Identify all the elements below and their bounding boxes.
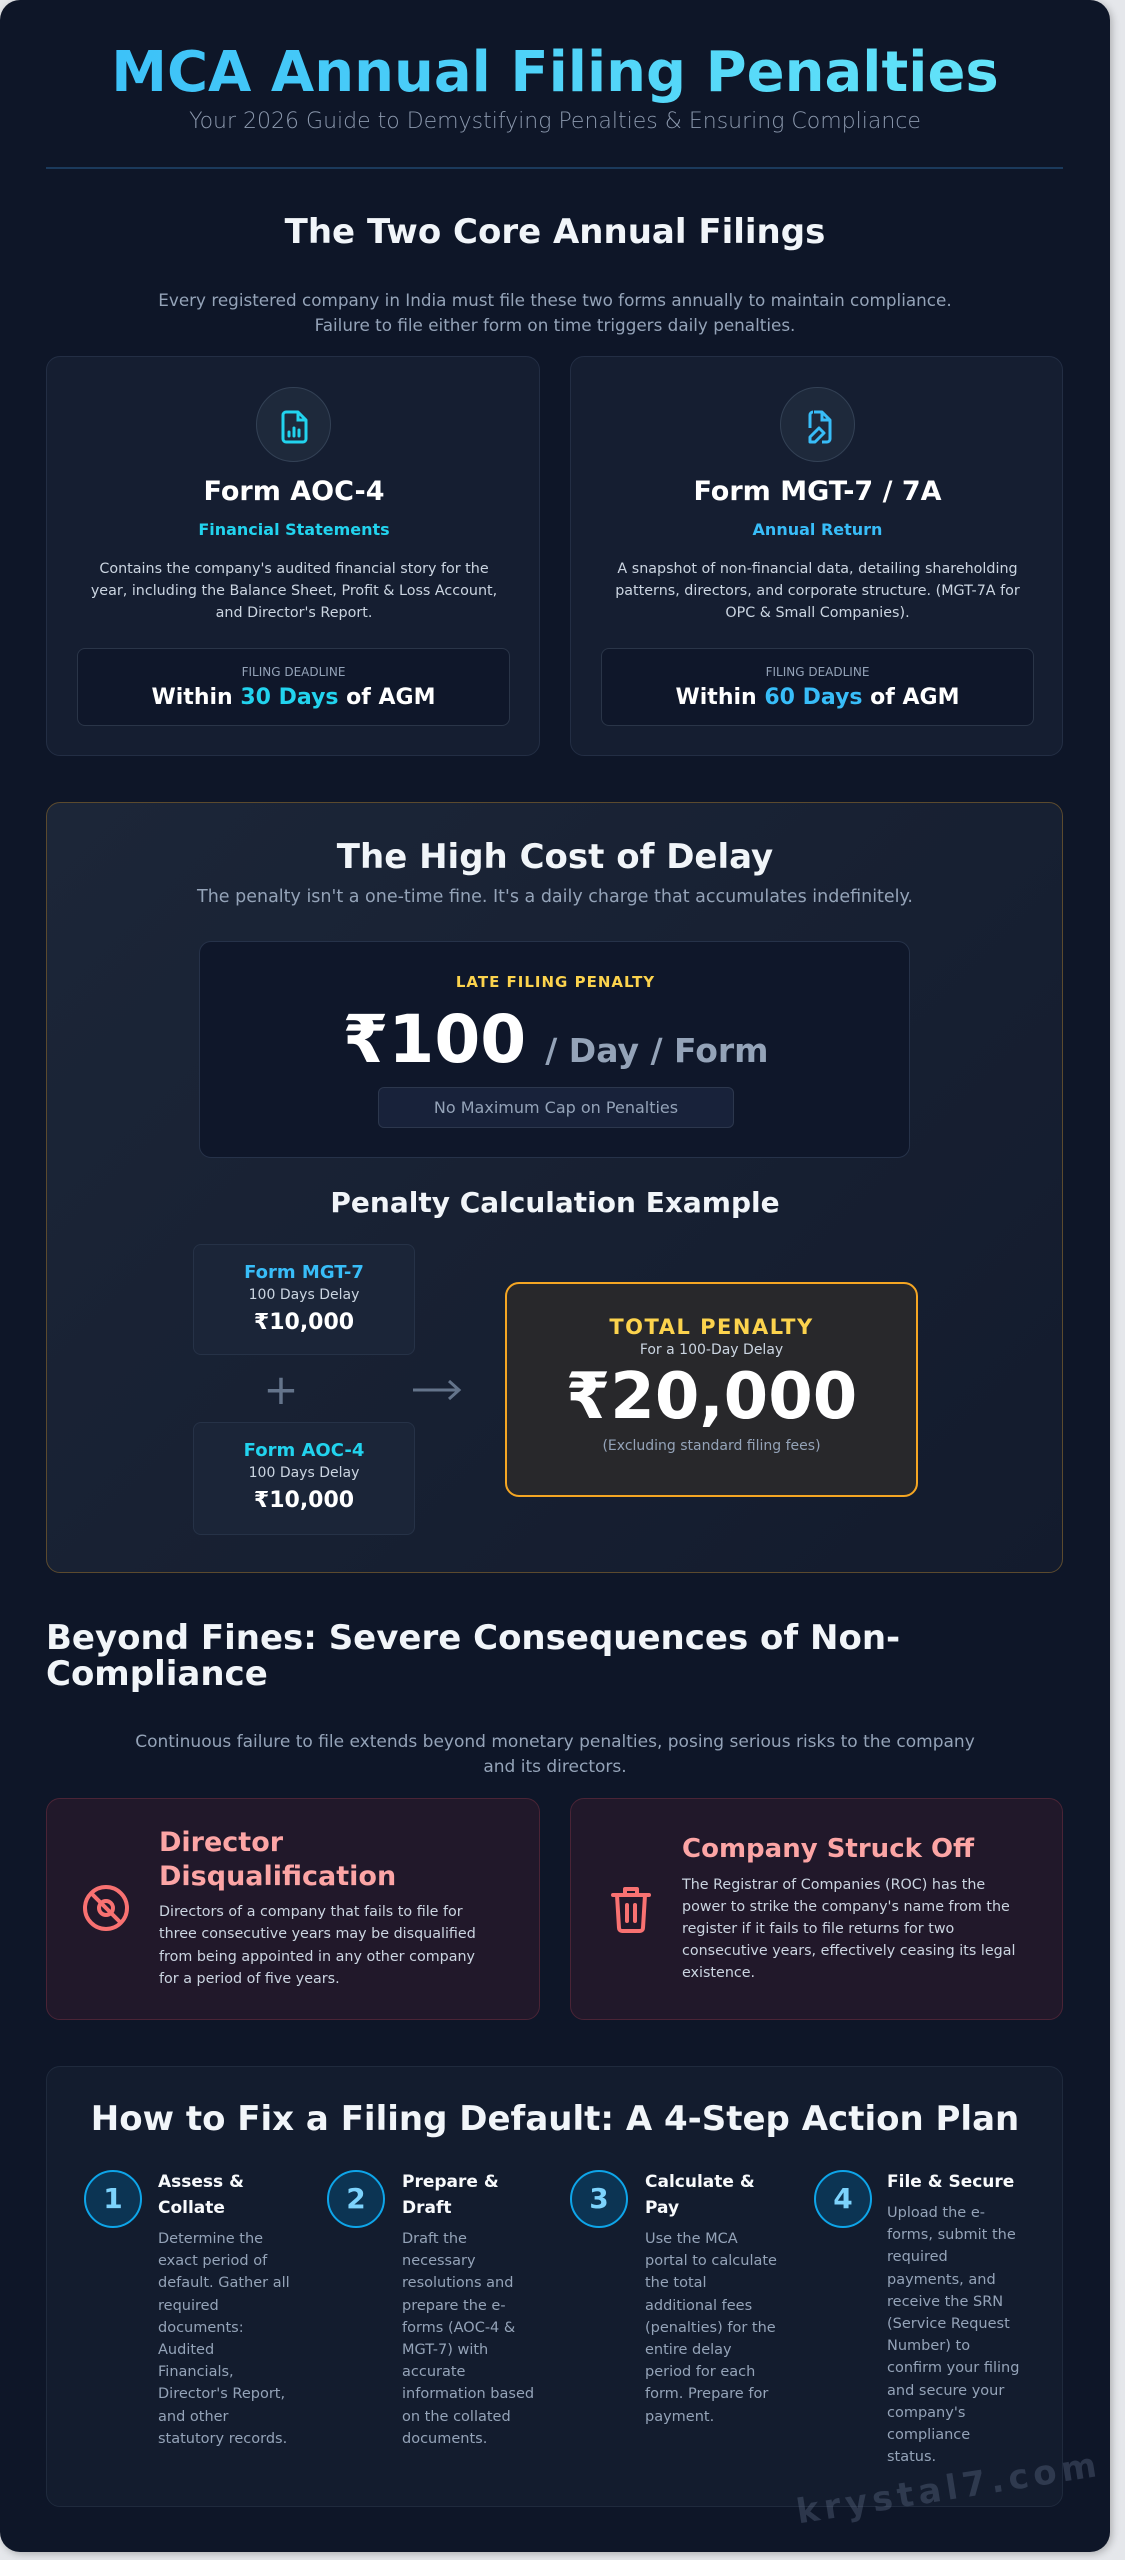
step 2: on the collated — [402, 2409, 511, 2425]
heading: high cost: The High Cost of Delay — [337, 837, 773, 877]
form title: Form MGT-7 / 7A — [693, 476, 942, 507]
no cap pill — [378, 1087, 734, 1128]
text: power to strike the company's name from the — [682, 1899, 1010, 1915]
step 2 — [327, 2170, 534, 2447]
step 2: accurate — [402, 2364, 465, 2380]
text: three consecutive years may be disqualified — [159, 1926, 476, 1942]
subtitle: Your 2026 Guide to Demystifying Penalties & Ensuring Compliance — [189, 109, 921, 134]
step 3 — [570, 2170, 777, 2425]
rate: ₹100 / Day / Form — [342, 1001, 769, 1078]
step 1: required — [158, 2298, 219, 2314]
title: MCA Annual Filing Penalties — [111, 40, 999, 105]
form title: Form AOC-4 — [203, 476, 385, 507]
arrow — [413, 1380, 462, 1400]
intro: consequences: Continuous failure to file extends beyond monetary penalties, posing serious risks to the company — [135, 1732, 975, 1752]
step 2: MGT-7) with — [402, 2342, 488, 2358]
step 4: compliance — [887, 2427, 970, 2443]
step 2: resolutions and — [402, 2275, 513, 2291]
text: consecutive years, effectively ceasing its legal — [682, 1943, 1015, 1959]
step 3: the total — [645, 2275, 707, 2291]
text — [159, 1904, 476, 1987]
step 3: 3 — [589, 2182, 609, 2215]
text: existence. — [682, 1965, 755, 1981]
step 4: company's — [887, 2405, 965, 2421]
step 2: 2 — [346, 2182, 366, 2215]
description: A snapshot of non-financial data, detailing shareholding — [617, 561, 1018, 577]
step 1 — [84, 2170, 290, 2447]
deadline box: Within 60 Days of AGM — [676, 685, 959, 710]
step 2: information based — [402, 2386, 534, 2402]
deadline box: FILING DEADLINE — [242, 665, 345, 679]
description — [615, 561, 1020, 621]
total penalty box: (Excluding standard filing fees) — [602, 1438, 821, 1454]
step 2: Draft the — [402, 2231, 467, 2247]
description — [91, 561, 497, 621]
box: AOC-4 — [193, 1422, 415, 1535]
step 4: confirm your filing — [887, 2360, 1019, 2376]
form subtitle: Annual Return — [753, 520, 882, 539]
panel: director disqualification — [46, 1798, 540, 2020]
total penalty box: For a 100-Day Delay — [640, 1342, 783, 1358]
intro text: Failure to file either form on time triggers daily penalties. — [315, 315, 795, 335]
step 1: and other — [158, 2409, 229, 2425]
text: from being appointed in any other company — [159, 1949, 475, 1965]
panel: high cost of delay — [46, 802, 1063, 1573]
description: OPC & Small Companies). — [725, 605, 910, 621]
description: year, including the Balance Sheet, Profit & Loss Account, — [91, 583, 497, 599]
step 1: 1 — [103, 2182, 123, 2215]
deadline box: Within 30 Days of AGM — [152, 685, 435, 710]
text: for a period of five years. — [159, 1971, 340, 1987]
penalty rate box — [199, 941, 910, 1158]
step 2: forms (AOC-4 & — [402, 2320, 515, 2336]
description: patterns, directors, and corporate structure. (MGT-7A for — [615, 583, 1020, 599]
label: LATE FILING PENALTY — [456, 973, 655, 991]
step 3: (penalties) for the — [645, 2320, 776, 2336]
step 4: and secure your — [887, 2383, 1004, 2399]
description: and Director's Report. — [216, 605, 372, 621]
watermark: krystal7.com — [794, 2445, 1104, 2532]
intro text — [158, 290, 952, 335]
title: Company Struck Off — [682, 1834, 974, 1864]
total penalty box — [505, 1282, 918, 1497]
step 1: documents: — [158, 2320, 244, 2336]
total penalty box: ₹20,000 — [566, 1360, 857, 1434]
step 2: Prepare & — [402, 2172, 499, 2192]
box: MGT-7: ₹10,000 — [254, 1310, 354, 1335]
step 2: Draft — [402, 2198, 452, 2218]
step 1: Collate — [158, 2198, 225, 2218]
step 1: Determine the — [158, 2231, 263, 2247]
step 4: receive the SRN — [887, 2294, 1003, 2310]
panel: MGT-7 — [570, 356, 1063, 756]
step 3: payment. — [645, 2409, 714, 2425]
text: register if it fails to file returns for two — [682, 1921, 954, 1937]
step 3: Use the MCA — [645, 2231, 738, 2247]
text: The Registrar of Companies (ROC) has the — [682, 1877, 985, 1893]
box: MGT-7: 100 Days Delay — [249, 1287, 359, 1303]
step 4 — [814, 2170, 1019, 2465]
step 3: additional fees — [645, 2298, 752, 2314]
step 2: documents. — [402, 2431, 487, 2447]
heading: calculation example: Penalty Calculation Example — [330, 1186, 780, 1219]
intro text: Every registered company in India must file these two forms annually to maintain compliance. — [158, 290, 952, 310]
step 4: Upload the e- — [887, 2205, 985, 2221]
step 1: Financials, — [158, 2364, 234, 2380]
heading: beyond fines: Beyond Fines: Severe Consequences of Non-Compliance — [46, 1618, 900, 1694]
description: Contains the company's audited financial story for the — [99, 561, 489, 577]
step 2: necessary — [402, 2253, 476, 2269]
step 3: entire delay — [645, 2342, 732, 2358]
box: AOC-4: ₹10,000 — [254, 1488, 354, 1513]
title: Disqualification — [159, 1861, 396, 1892]
box: MGT-7 — [193, 1244, 415, 1355]
no cap pill: No Maximum Cap on Penalties — [434, 1098, 678, 1117]
total penalty box: TOTAL PENALTY — [609, 1315, 814, 1339]
form subtitle: Financial Statements — [198, 520, 390, 539]
step 3: portal to calculate — [645, 2253, 777, 2269]
step 3: form. Prepare for — [645, 2386, 768, 2402]
title: Director — [159, 1827, 283, 1858]
text — [682, 1877, 1015, 1981]
panel: AOC-4 — [46, 356, 540, 756]
box: AOC-4: Form AOC-4 — [244, 1440, 364, 1461]
step 2: prepare the e- — [402, 2298, 506, 2314]
icon: trash — [611, 1887, 651, 1933]
step 4: File & Secure — [887, 2172, 1014, 2192]
icon: plus: + — [263, 1365, 299, 1414]
step 3: period for each — [645, 2364, 755, 2380]
step 4: (Service Request — [887, 2316, 1010, 2332]
heading: action plan: How to Fix a Filing Default: A 4-Step Action Plan — [91, 2099, 1019, 2139]
intro: consequences — [135, 1732, 975, 1777]
step 1: Director's Report, — [158, 2386, 285, 2402]
step 3: Pay — [645, 2198, 679, 2218]
deadline box — [601, 648, 1034, 726]
text: Directors of a company that fails to file for — [159, 1904, 463, 1920]
step 4: forms, submit the — [887, 2227, 1016, 2243]
step 1: Audited — [158, 2342, 214, 2358]
step 1: exact period of — [158, 2253, 267, 2269]
heading: two core filings: The Two Core Annual Filings — [285, 212, 825, 252]
step 1: statutory records. — [158, 2431, 287, 2447]
icon: document chart — [256, 387, 331, 462]
step 4: Number) to — [887, 2338, 970, 2354]
subtitle: high cost: The penalty isn't a one-time fine. It's a daily charge that accumulates indefinitely. — [197, 887, 913, 907]
step 3: Calculate & — [645, 2172, 755, 2192]
step 4: required — [887, 2249, 948, 2265]
intro: consequences: and its directors. — [483, 1757, 627, 1777]
step 1: default. Gather all — [158, 2275, 290, 2291]
box: MGT-7: Form MGT-7 — [244, 1262, 364, 1283]
step 4: payments, and — [887, 2272, 996, 2288]
panel: company struck off — [570, 1798, 1063, 2020]
box: AOC-4: 100 Days Delay — [249, 1465, 359, 1481]
step 4: status. — [887, 2449, 936, 2465]
deadline box: FILING DEADLINE — [766, 665, 869, 679]
panel: action plan — [46, 2066, 1063, 2507]
deadline box — [77, 648, 510, 726]
title — [159, 1827, 396, 1892]
step 1: Assess & — [158, 2172, 244, 2192]
icon: ban — [83, 1885, 129, 1931]
icon: document edit — [780, 387, 855, 462]
step 4: 4 — [833, 2182, 853, 2215]
